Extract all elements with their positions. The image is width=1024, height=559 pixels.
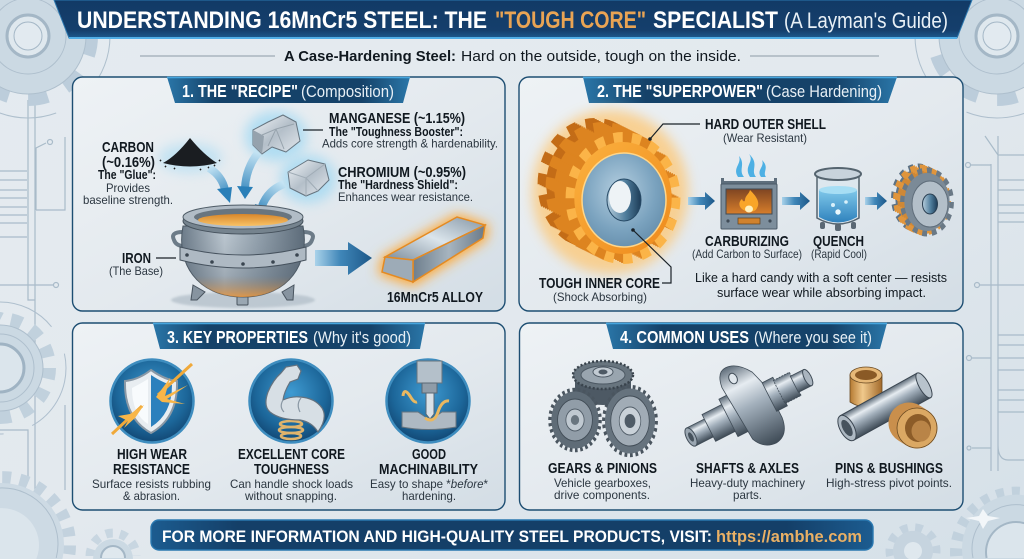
uses 3 text: [826, 461, 952, 490]
arrow: furnace to quench: [782, 192, 810, 210]
icon: chromium rock: [280, 155, 336, 203]
arrow: manganese into pot: [237, 153, 258, 199]
arrow: quench to finished gear: [865, 192, 887, 210]
iron label: [109, 250, 176, 278]
manganese callout line: [303, 129, 323, 131]
manganese label: [322, 110, 498, 150]
panel 2 heading: [583, 77, 897, 103]
property 3 text: hardening.: [402, 489, 456, 503]
property 3 text: Easy to shape *before*: [370, 477, 488, 491]
core callout: TOUGH INNER CORE: [539, 275, 660, 292]
uses 2 text: [690, 461, 805, 502]
panel 1: the recipe: [72, 77, 505, 311]
arrow: pot to alloy: [315, 242, 372, 275]
manganese label: MANGANESE (~1.15%): [329, 110, 465, 127]
carbon label: [83, 139, 173, 207]
chromium label: The "Hardness Shield":: [338, 178, 458, 192]
icon: finished small gear: [894, 167, 951, 233]
uses 3 text: PINS & BUSHINGS: [835, 461, 943, 477]
gear: bottom right large: [958, 495, 1024, 559]
step labels: (Rapid Cool): [811, 247, 867, 261]
gear: bottom left small: [90, 533, 136, 559]
panel 1 heading: 1. THE "RECIPE": [182, 81, 298, 101]
icon: shield wear resistance: [110, 360, 194, 442]
gear: top right: [915, 0, 1024, 118]
panel 2 heading: 2. THE "SUPERPOWER": [597, 81, 763, 101]
carbon label: baseline strength.: [83, 193, 173, 207]
core callout: (Shock Absorbing): [553, 290, 647, 304]
icon: alloy ingot: [378, 214, 489, 286]
icon: gears and pinions: [550, 361, 656, 455]
title text: UNDERSTANDING 16MnCr5 STEEL: THE: [77, 7, 487, 34]
panel 2 heading: (Case Hardening): [766, 82, 882, 101]
analogy text: surface wear while absorbing impact.: [717, 285, 926, 300]
arrow: gear to furnace: [688, 192, 715, 210]
sparkle watermark: [966, 509, 1000, 529]
chromium label: CHROMIUM (~0.95%): [338, 164, 466, 181]
carbon label: CARBON: [102, 139, 154, 156]
subtitle: [140, 48, 879, 65]
manganese label: Adds core strength & hardenability.: [322, 136, 498, 150]
property 2 text: TOUGHNESS: [254, 462, 329, 478]
carbon label: The "Glue":: [98, 168, 156, 182]
icon: shaft and axle: [666, 335, 831, 478]
panel 3: key properties: [72, 323, 505, 510]
icon: manganese rock: [245, 111, 307, 161]
shell callout: [648, 116, 826, 145]
icon: carburizing furnace: [721, 154, 777, 229]
analogy text: [695, 270, 947, 300]
title text: [77, 7, 948, 34]
property 2 text: without snapping.: [244, 489, 337, 503]
shell callout: HARD OUTER SHELL: [705, 116, 826, 133]
subtitle: A Case-Hardening Steel:: [284, 48, 456, 65]
iron label: IRON: [122, 250, 151, 267]
gear: bottom left: [0, 479, 68, 559]
panel 4 heading: [606, 323, 887, 349]
step labels: [692, 233, 867, 261]
panel 3 heading: (Why it's good): [313, 328, 411, 347]
uses 1 text: drive components.: [554, 488, 650, 502]
panel 4 heading: 4. COMMON USES: [620, 327, 749, 347]
property 3 text: MACHINABILITY: [379, 462, 478, 478]
manganese label: The "Toughness Booster":: [329, 125, 463, 139]
gear: bottom right small: [890, 528, 936, 559]
icon: machining drill: [386, 360, 470, 442]
icon: pins and bushings: [834, 367, 937, 448]
icon: quench beaker: [815, 168, 861, 231]
footer call to action: [151, 520, 873, 550]
core callout: [539, 228, 671, 304]
arrow: carbon into pot: [209, 168, 232, 203]
panel 3 heading: 3. KEY PROPERTIES: [167, 327, 308, 347]
panel 4: common uses: [520, 323, 963, 510]
property 3 text: GOOD: [412, 447, 446, 463]
iron label: (The Base): [109, 264, 163, 278]
arrow: chromium into pot: [255, 184, 284, 218]
panel 2: the superpower: [519, 77, 963, 311]
shell callout: (Wear Resistant): [723, 131, 807, 145]
panel 3 heading: [153, 323, 425, 349]
title text: "TOUGH CORE": [495, 7, 646, 34]
uses 2 text: parts.: [733, 488, 762, 502]
title text: SPECIALIST: [653, 7, 778, 34]
property 1 text: & abrasion.: [123, 489, 180, 503]
footer call to action: https://ambhe.com: [716, 527, 862, 546]
title banner: [54, 0, 972, 38]
icon: melting pot: [171, 205, 315, 308]
uses 1 text: GEARS & PINIONS: [548, 461, 657, 477]
property 1 text: HIGH WEAR: [117, 447, 187, 463]
property 1 text: RESISTANCE: [113, 462, 190, 478]
step labels: (Add Carbon to Surface): [692, 247, 802, 261]
subtitle: Hard on the outside, tough on the inside.: [461, 48, 741, 65]
step labels: QUENCH: [813, 233, 864, 250]
property 3 text: [370, 447, 488, 503]
gear: top left: [0, 0, 110, 118]
gear: left middle: [0, 302, 66, 434]
uses 1 text: Vehicle gearboxes,: [554, 476, 651, 490]
property 1 text: [92, 447, 211, 503]
carbon label: Provides: [106, 181, 150, 195]
icon: muscle and spring: [250, 360, 332, 442]
icon: carbon powder: [158, 138, 222, 173]
analogy text: Like a hard candy with a soft center — resists: [695, 270, 947, 285]
panel 1 heading: [167, 77, 410, 103]
property 2 text: Can handle shock loads: [230, 477, 353, 491]
panel 1 heading: (Composition): [301, 82, 394, 101]
uses 2 text: Heavy-duty machinery: [690, 476, 805, 490]
chromium label: [338, 164, 473, 204]
footer call to action: FOR MORE INFORMATION AND HIGH-QUALITY STEEL PRODUCTS, VISIT:: [162, 527, 712, 546]
chromium label: Enhances wear resistance.: [338, 190, 473, 204]
uses 1 text: [548, 461, 657, 502]
carbon label: (~0.16%): [102, 154, 155, 171]
alloy label: 16MnCr5 ALLOY: [387, 290, 483, 306]
uses 3 text: High-stress pivot points.: [826, 476, 952, 490]
icon: big case-hardened gear: [532, 110, 688, 274]
step labels: CARBURIZING: [705, 233, 789, 250]
uses 2 text: SHAFTS & AXLES: [696, 461, 799, 477]
panel 4 heading: (Where you see it): [754, 328, 872, 347]
property 1 text: Surface resists rubbing: [92, 477, 211, 491]
property 2 text: EXCELLENT CORE: [238, 447, 345, 463]
property 2 text: [230, 447, 353, 503]
title text: (A Layman's Guide): [784, 8, 948, 33]
